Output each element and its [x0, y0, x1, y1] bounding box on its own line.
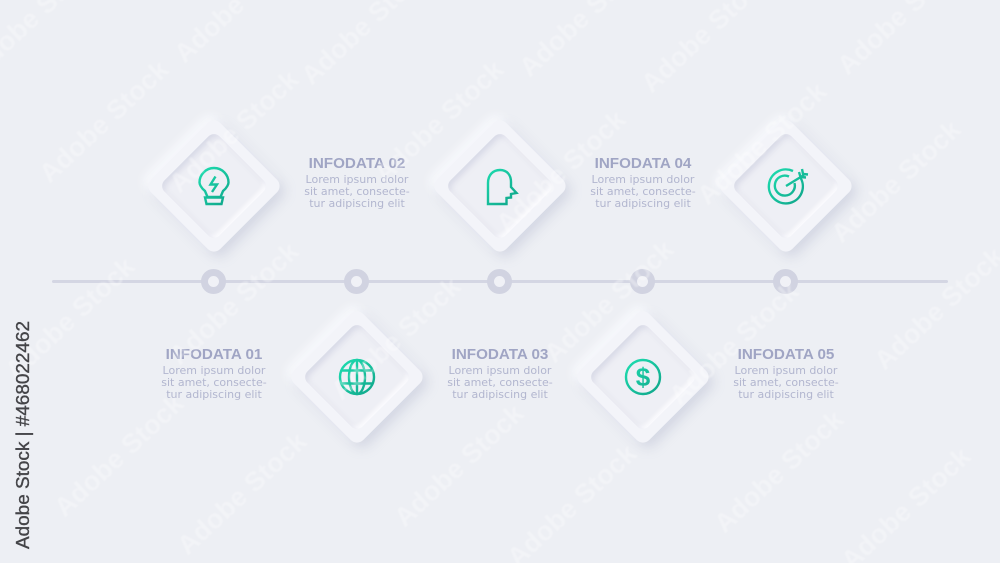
- text block: Infodata 05: Lorem ipsum dolor: [735, 364, 837, 377]
- timeline node 2: [344, 268, 369, 294]
- timeline node 4: [630, 268, 655, 294]
- timeline node 1: [201, 268, 226, 294]
- watermark pattern: Adobe Stock: [825, 114, 967, 249]
- watermark pattern: Adobe Stock: [33, 54, 175, 189]
- text block: Infodata 04: INFODATA 04: [595, 155, 691, 172]
- text block: Infodata 04: sit amet, consecte-: [590, 185, 696, 198]
- text block: Infodata 02: tur adipiscing elit: [309, 197, 405, 210]
- panel: diamond card with globe: [293, 313, 429, 449]
- text block: Infodata 03: Lorem ipsum dolor: [449, 364, 551, 377]
- text block: Infodata 01: INFODATA 01: [166, 346, 262, 363]
- text block: Infodata 03: INFODATA 03: [452, 346, 548, 363]
- text block: Infodata 05: [733, 346, 839, 401]
- panel: diamond card with head profile: [436, 122, 572, 258]
- timeline node 5: [773, 268, 798, 294]
- text block: Infodata 02: sit amet, consecte-: [304, 185, 410, 198]
- text block: Infodata 03: tur adipiscing elit: [452, 388, 548, 401]
- timeline axis: [52, 280, 948, 283]
- watermark pattern: Adobe Stock: [48, 388, 190, 523]
- icon: target with arrow: [768, 168, 808, 205]
- watermark pattern: Adobe Stock: [0, 251, 141, 386]
- timeline node 3: [487, 268, 512, 294]
- watermark pattern: Adobe Stock: [490, 104, 632, 239]
- text block: Infodata 02: Lorem ipsum dolor: [306, 173, 408, 186]
- watermark pattern: Adobe Stock: [538, 234, 680, 369]
- text block: Infodata 04: [590, 155, 696, 210]
- text block: Infodata 05: sit amet, consecte-: [733, 376, 839, 389]
- text block: Infodata 02: INFODATA 02: [309, 155, 405, 172]
- watermark pattern: Adobe Stock: [691, 76, 833, 211]
- icon: globe: [338, 358, 376, 396]
- watermark pattern: Adobe Stock: [171, 426, 313, 561]
- watermark pattern: Adobe Stock: [325, 271, 467, 406]
- watermark pattern: Adobe Stock: [368, 54, 510, 189]
- text block: Infodata 01: tur adipiscing elit: [166, 388, 262, 401]
- icon: lightbulb: [198, 166, 230, 206]
- watermark pattern: Adobe Stock: [163, 64, 305, 199]
- text block: Infodata 04: tur adipiscing elit: [595, 197, 691, 210]
- text block: Infodata 02: [304, 155, 410, 210]
- text block: Infodata 01: [161, 346, 267, 401]
- text block: Infodata 01: sit amet, consecte-: [161, 376, 267, 389]
- text block: Infodata 01: Lorem ipsum dolor: [163, 364, 265, 377]
- watermark pattern: Adobe Stock: [708, 404, 850, 539]
- watermark pattern: Adobe Stock: [663, 276, 805, 411]
- text block: Infodata 05: tur adipiscing elit: [738, 388, 834, 401]
- stock credit vertical text: Adobe Stock | #468022462: [13, 321, 33, 549]
- icon: dollar coin: [624, 358, 662, 396]
- text block: Infodata 03: sit amet, consecte-: [447, 376, 553, 389]
- panel: diamond card with lightbulb: [150, 122, 286, 258]
- text block: Infodata 05: INFODATA 05: [738, 346, 834, 363]
- text block: Infodata 03: [447, 346, 553, 401]
- icon: head profile: [486, 168, 519, 206]
- text block: Infodata 04: Lorem ipsum dolor: [592, 173, 694, 186]
- watermark pattern: Adobe Stock: [388, 398, 530, 533]
- watermark pattern: Adobe Stock: [163, 236, 305, 371]
- panel: diamond card with target: [722, 123, 858, 258]
- icon: dollar coin: $: [636, 362, 651, 392]
- panel: diamond card with dollar coin: [579, 313, 715, 449]
